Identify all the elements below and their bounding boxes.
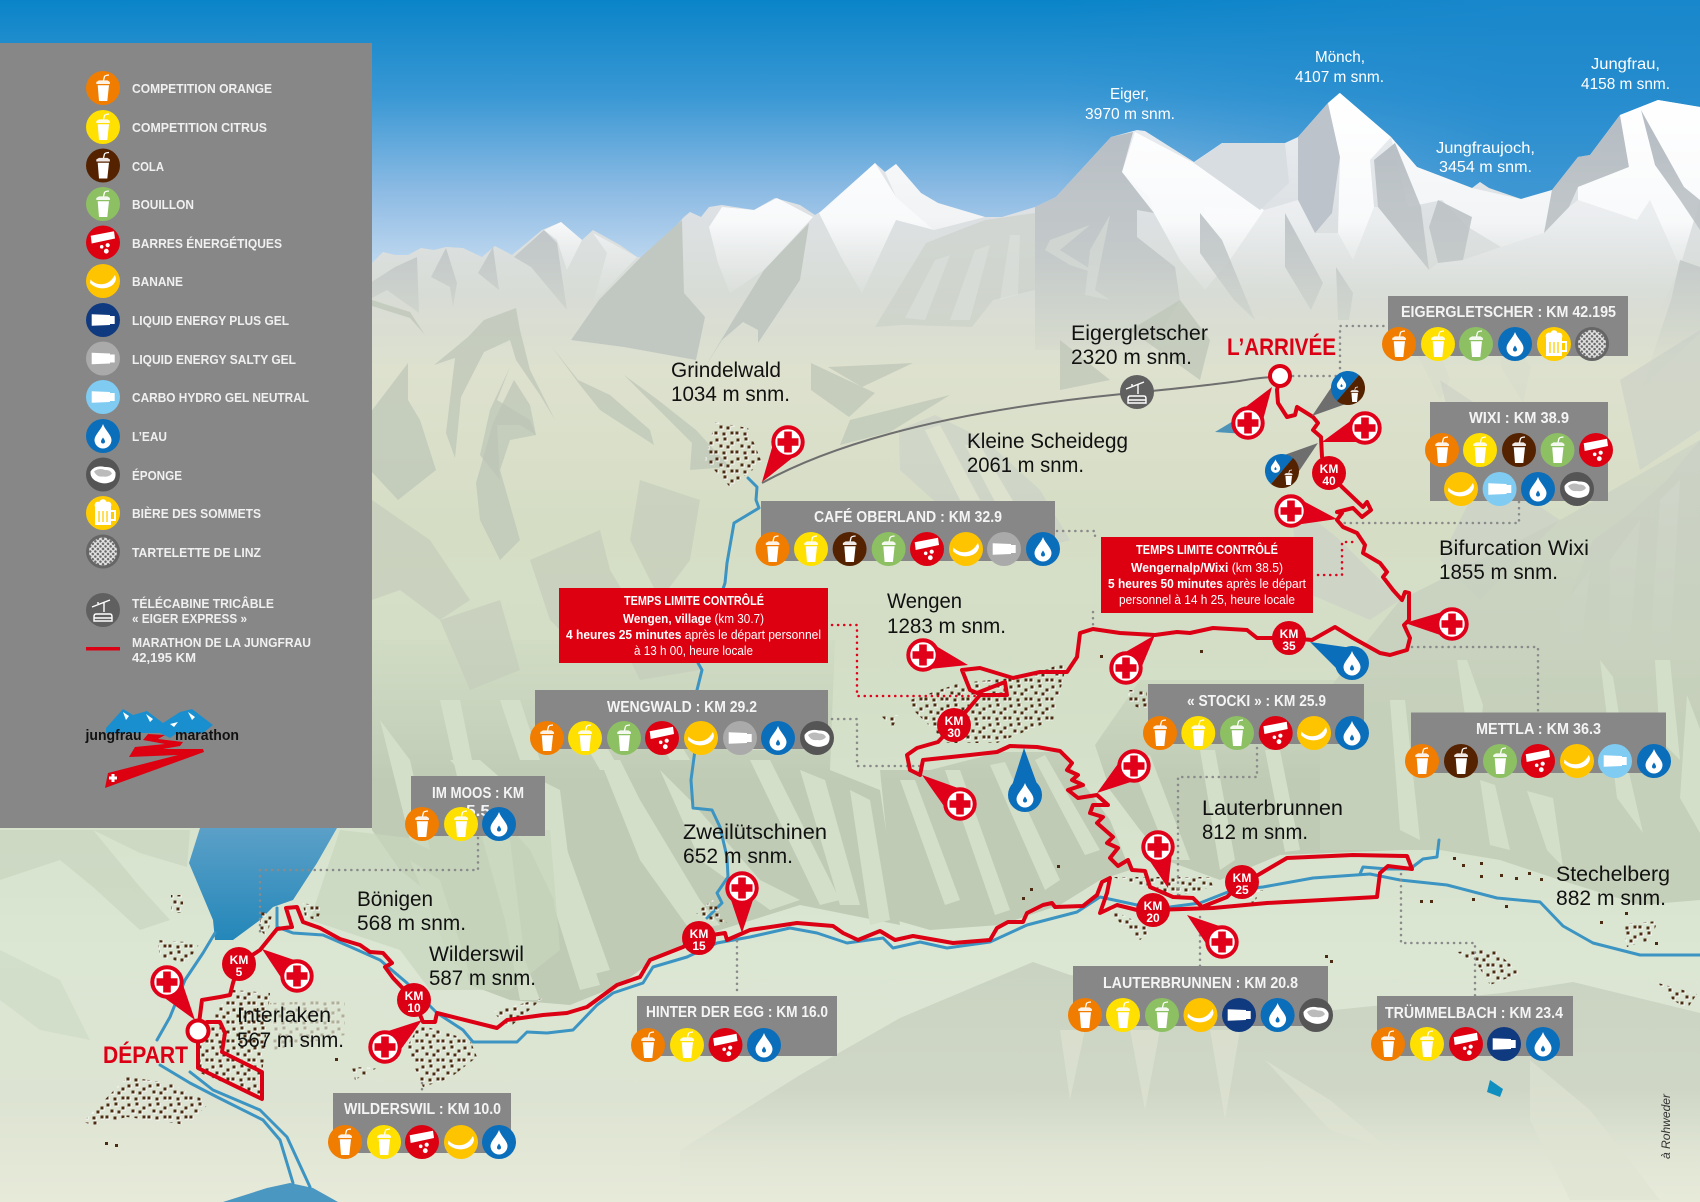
place names: Grindelwald xyxy=(671,358,781,382)
logo: jungfrau marathon: marathon xyxy=(175,727,239,744)
kilometre markers: KM xyxy=(690,927,708,941)
panel: Eigergletscher: EIGERGLETSCHER : KM 42.195 xyxy=(1401,304,1616,321)
callout: time limit Wengen: à 13 h 00, heure locale xyxy=(634,644,753,658)
legend: banana xyxy=(86,264,183,298)
place names: Stechelberg xyxy=(1556,862,1670,886)
panel: Hinter der Egg xyxy=(631,996,837,1062)
cable car line xyxy=(762,377,1272,483)
callout: time limit Wengen: Wengen, village (km 30.7) xyxy=(623,612,764,626)
start marker xyxy=(103,1020,208,1069)
rivers and lakes xyxy=(157,420,1700,1202)
legend: cola xyxy=(86,148,165,182)
logo: jungfrau marathon xyxy=(85,709,239,788)
place names: 812 m snm. xyxy=(1202,820,1308,844)
water and cola pins xyxy=(1265,371,1365,488)
callout: time limit Wengernalp xyxy=(1101,537,1313,613)
panel: Hinter der Egg: HINTER DER EGG : KM 16.0 xyxy=(646,1004,828,1021)
panel: Lauterbrunnen: LAUTERBRUNNEN : KM 20.8 xyxy=(1103,975,1298,992)
kilometre markers: KM xyxy=(1320,462,1338,476)
panel: Lauterbrunnen xyxy=(1068,966,1333,1032)
legend: bouillon xyxy=(86,187,194,221)
scattered houses xyxy=(105,650,1658,1147)
place names: Zweilütschinen xyxy=(683,820,827,844)
logo: jungfrau marathon: jungfrau xyxy=(85,727,142,744)
legend: beer xyxy=(86,496,261,530)
legend: banana: BANANE xyxy=(132,274,183,289)
kilometre markers: KM xyxy=(1233,871,1251,885)
place names: 882 m snm. xyxy=(1556,886,1666,910)
kilometre markers: 20 xyxy=(1146,911,1160,925)
legend: carbo gel: CARBO HYDRO GEL NEUTRAL xyxy=(132,390,309,405)
peak names: Eiger, xyxy=(1110,86,1149,103)
kilometre markers: KM xyxy=(1144,899,1162,913)
panel: Im Moos xyxy=(405,776,545,841)
kilometre markers: 35 xyxy=(1282,639,1296,653)
legend: route: MARATHON DE LA JUNGFRAU xyxy=(132,635,311,650)
peak names: 4107 m snm. xyxy=(1295,69,1384,86)
legend: bouillon: BOUILLON xyxy=(132,197,194,212)
peak names: 4158 m snm. xyxy=(1581,76,1670,93)
kilometre markers: KM xyxy=(230,953,248,967)
place names: 568 m snm. xyxy=(357,911,466,935)
legend: plus gel: LIQUID ENERGY PLUS GEL xyxy=(132,313,289,328)
peak names xyxy=(1085,49,1670,176)
legend: plus gel xyxy=(86,303,289,337)
water pins xyxy=(1008,642,1369,812)
legend: cable car xyxy=(86,593,274,627)
callout: time limit Wengen xyxy=(559,588,828,663)
credit: à Rohweder xyxy=(1661,1093,1673,1159)
dotted leader lines xyxy=(260,326,1538,1093)
panel: Wengwald: WENGWALD : KM 29.2 xyxy=(607,699,757,716)
callout: time limit Wengen: 4 heures 25 minutes après le départ personnel xyxy=(566,628,821,642)
callout: time limit Wengen: TEMPS LIMITE CONTRÔLÉ xyxy=(624,593,764,608)
legend: beer: BIÈRE DES SOMMETS xyxy=(132,506,261,521)
kilometre markers: 40 xyxy=(1322,474,1336,488)
place names: Eigergletscher xyxy=(1071,321,1208,345)
villages xyxy=(83,422,1697,1125)
place names: Wilderswil xyxy=(429,942,524,966)
legend: salty gel: LIQUID ENERGY SALTY GEL xyxy=(132,352,296,367)
place names: 567 m snm. xyxy=(237,1028,344,1052)
peak names: 3970 m snm. xyxy=(1085,106,1175,123)
place names: 1855 m snm. xyxy=(1439,560,1558,584)
place names: 2061 m snm. xyxy=(967,453,1084,477)
panel: Im Moos: 5.5 xyxy=(466,803,490,820)
panel: Wilderswil: WILDERSWIL : KM 10.0 xyxy=(344,1101,501,1118)
place names: Wengen xyxy=(887,589,962,613)
legend: linzer tartlet xyxy=(86,534,261,568)
kilometre markers: 10 xyxy=(407,1001,421,1015)
panel: Wengwald xyxy=(530,690,834,755)
legend: linzer tartlet: TARTELETTE DE LINZ xyxy=(132,545,261,560)
kilometre markers: KM xyxy=(405,989,423,1003)
legend: carbo gel xyxy=(86,380,309,414)
place names: Kleine Scheidegg xyxy=(967,429,1128,453)
place names: Interlaken xyxy=(237,1003,331,1027)
panel: Im Moos: IM MOOS : KM xyxy=(432,785,524,802)
legend: cola: COLA xyxy=(132,159,165,174)
legend: competition citrus: COMPETITION CITRUS xyxy=(132,120,267,135)
sky xyxy=(0,0,1700,270)
place names: 1034 m snm. xyxy=(671,382,790,406)
peak names: Jungfrau, xyxy=(1591,56,1660,73)
legend: energy bars: BARRES ÉNERGÉTIQUES xyxy=(132,236,282,251)
kilometre markers: 15 xyxy=(692,939,706,953)
panel: Trümmelbach xyxy=(1371,996,1573,1061)
kilometre markers: KM xyxy=(945,714,963,728)
legend: cable car: TÉLÉCABINE TRICÂBLE xyxy=(132,596,274,611)
panel: Wixi xyxy=(1425,402,1613,506)
first aid pins xyxy=(152,387,1467,1062)
legend: competition orange: COMPETITION ORANGE xyxy=(132,81,272,96)
legend: competition citrus xyxy=(86,110,267,144)
callout: time limit Wengernalp: TEMPS LIMITE CONTRÔLÉ xyxy=(1136,542,1278,557)
legend: sponge: ÉPONGE xyxy=(132,468,182,483)
panel: Mettla: METTLA : KM 36.3 xyxy=(1476,721,1601,738)
legend: sponge xyxy=(86,458,182,492)
place names: 652 m snm. xyxy=(683,844,793,868)
legend: competition orange xyxy=(86,71,272,105)
callout: time limit Wengernalp: personnel à 14 h 25, heure locale xyxy=(1119,593,1295,607)
finish marker xyxy=(1227,333,1336,386)
legend: water xyxy=(86,419,167,453)
legend: route: 42,195 KM xyxy=(132,650,196,665)
panel: Mettla xyxy=(1405,712,1671,778)
panel: Trümmelbach: TRÜMMELBACH : KM 23.4 xyxy=(1385,1005,1563,1022)
legend: water: L’EAU xyxy=(132,429,167,444)
place names: Bifurcation Wixi xyxy=(1439,536,1589,560)
place names: Bönigen xyxy=(357,887,433,911)
legend: energy bars xyxy=(86,226,282,260)
finish marker: L’ARRIVÉE xyxy=(1227,333,1336,361)
callout: time limit Wengernalp: 5 heures 50 minutes après le départ xyxy=(1108,577,1307,591)
panel: Wixi: WIXI : KM 38.9 xyxy=(1469,410,1569,427)
peak names: Jungfraujoch, xyxy=(1436,140,1535,157)
panel: Stocki: « STOCKI » : KM 25.9 xyxy=(1187,693,1326,710)
kilometre markers: 5 xyxy=(236,965,243,979)
panel: legend xyxy=(0,43,372,828)
panel: Wilderswil xyxy=(328,1093,516,1159)
marathon route xyxy=(198,376,1412,1099)
legend: route xyxy=(86,635,311,665)
peak names: Mönch, xyxy=(1315,49,1365,66)
panel: Café Oberland xyxy=(756,501,1060,566)
legend: salty gel xyxy=(86,342,296,376)
place names: 2320 m snm. xyxy=(1071,345,1192,369)
callout: time limit Wengernalp: Wengernalp/Wixi (km 38.5) xyxy=(1131,561,1283,575)
kilometre markers: 30 xyxy=(947,726,961,740)
peak names: 3454 m snm. xyxy=(1439,159,1532,176)
kilometre markers: KM xyxy=(1280,627,1298,641)
kilometre markers: 25 xyxy=(1235,883,1249,897)
legend: cable car: « EIGER EXPRESS » xyxy=(132,611,247,626)
place names xyxy=(237,321,1670,1052)
panel: Eigergletscher xyxy=(1382,296,1628,361)
panel: Stocki xyxy=(1143,684,1369,750)
cable car station icon xyxy=(1120,375,1154,409)
start marker: DÉPART xyxy=(103,1041,188,1069)
place names: 1283 m snm. xyxy=(887,614,1006,638)
place names: Lauterbrunnen xyxy=(1202,796,1343,820)
panel: Café Oberland: CAFÉ OBERLAND : KM 32.9 xyxy=(814,509,1002,526)
place names: 587 m snm. xyxy=(429,966,536,990)
kilometre markers xyxy=(222,456,1346,1017)
